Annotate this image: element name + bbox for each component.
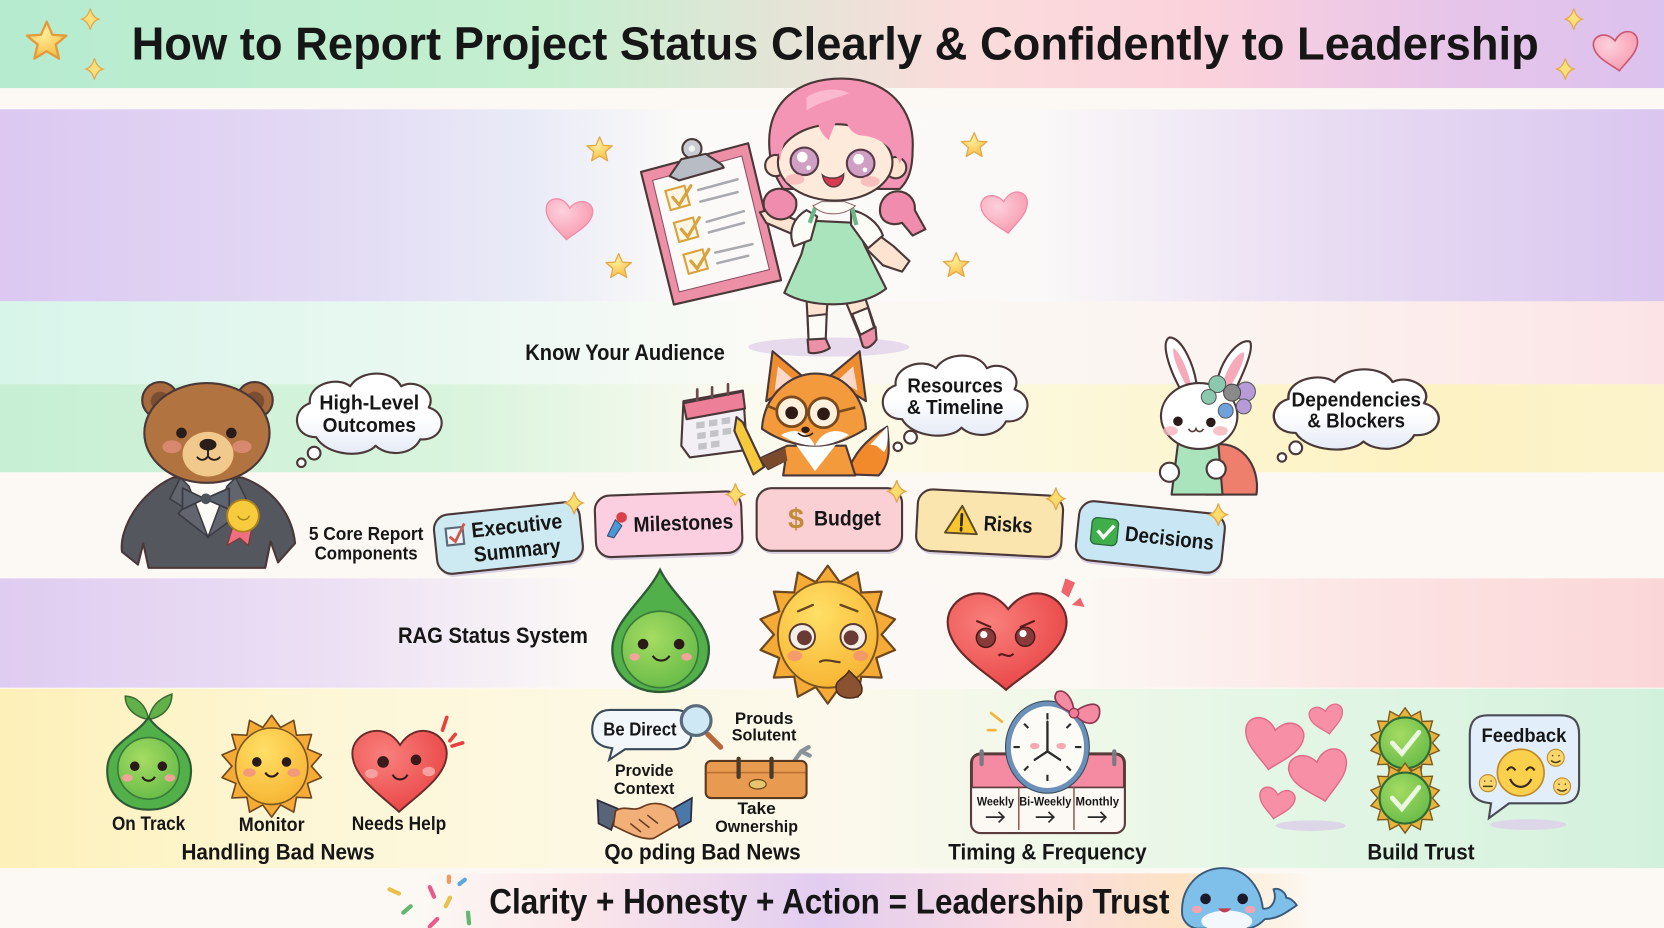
icon: suitcase with wrench xyxy=(706,747,810,798)
flower xyxy=(1201,376,1255,418)
pill: Budget: Budget xyxy=(814,507,881,530)
title banner xyxy=(0,0,1664,88)
thought cloud: Resources & Timeline: Resources xyxy=(907,376,1003,398)
dress xyxy=(784,221,886,304)
text: Take Ownership: Ownership xyxy=(715,817,798,836)
hair back xyxy=(769,79,913,189)
bow tie xyxy=(183,488,229,509)
section heading: Handling Bad News: Handling Bad News xyxy=(181,840,375,865)
icon: red RAG heart xyxy=(948,578,1085,690)
character: bunny with backpack xyxy=(1160,337,1257,495)
icon: handshake xyxy=(597,798,692,839)
icon: header star and sparkles left xyxy=(27,8,103,80)
label: 5 Core Report Components: Components xyxy=(315,543,418,563)
ears xyxy=(765,155,786,176)
icon: sparkle on Risks xyxy=(1047,488,1065,510)
status icon: Monitor xyxy=(222,715,321,836)
text: Provide Context: Context xyxy=(614,779,675,798)
illustration: floating stars and hearts around girl xyxy=(543,133,1031,278)
face xyxy=(778,124,892,201)
icon: calendar with clock and bow: Monthly xyxy=(1076,795,1120,808)
icon: floating hearts xyxy=(1240,703,1354,831)
bunny body xyxy=(1172,444,1223,495)
icon: sparkle on Decisions xyxy=(1209,504,1227,526)
label: 5 Core Report Components xyxy=(309,524,423,563)
fox body xyxy=(760,446,855,475)
pill: Budget: $ xyxy=(788,503,804,535)
text: Prouds Solutent: Prouds xyxy=(735,709,793,728)
fox head xyxy=(762,374,866,446)
clock xyxy=(1008,704,1087,791)
tail xyxy=(847,427,889,475)
thought cloud: Dependencies & Blockers: Dependencies xyxy=(1292,389,1421,411)
status icon: Monitor: Monitor xyxy=(239,815,305,836)
character: blue whale xyxy=(1182,868,1297,928)
glasses xyxy=(766,397,855,436)
thought cloud: High-Level Outcomes: High-Level xyxy=(319,393,419,415)
pill: Executive Summary: Summary xyxy=(473,535,562,567)
bow xyxy=(1055,691,1100,723)
icon: confetti xyxy=(389,877,469,926)
footer banner xyxy=(414,873,1316,928)
title: How to Report Project Status Clearly & Confidently to Leadership xyxy=(132,17,1539,69)
pill: Executive Summary: Executive xyxy=(470,510,564,543)
bear body xyxy=(122,478,295,568)
head xyxy=(1161,383,1237,449)
label: 5 Core Report Components: 5 Core Report xyxy=(309,524,423,544)
pill: Milestones xyxy=(594,491,744,561)
text: Provide Context: Provide xyxy=(615,761,673,780)
rosette xyxy=(227,524,253,545)
footer takeaway: Clarity + Honesty + Action = Leadership Trust xyxy=(489,883,1170,922)
clipboard xyxy=(641,139,781,305)
legs and shoes xyxy=(807,297,876,340)
text: Take Ownership xyxy=(715,799,798,836)
pill: Risks xyxy=(915,489,1065,561)
icon: green RAG drop xyxy=(612,570,709,692)
text: Prouds Solutent: Solutent xyxy=(732,726,797,745)
status icon: On Track: On Track xyxy=(112,814,186,835)
ears xyxy=(1166,337,1197,393)
section heading: Timing & Frequency: Timing & Frequency xyxy=(948,840,1147,865)
head xyxy=(144,383,270,483)
icon: Be Direct speech bubble with magnifier xyxy=(592,706,721,760)
section heading: Build Trust: Build Trust xyxy=(1367,840,1475,865)
character: fox with calendar xyxy=(681,351,889,475)
status icon: Needs Help: Needs Help xyxy=(352,814,446,835)
thought cloud: High-Level Outcomes: Outcomes xyxy=(323,415,416,437)
text: Provide Context xyxy=(614,761,675,798)
label: Know Your Audience: Know Your Audience xyxy=(525,340,725,365)
icon: calendar with clock and bow: Bi-Weekly xyxy=(1019,795,1072,808)
pill: Decisions: Decisions xyxy=(1124,523,1215,555)
icon: two check badges xyxy=(1371,708,1439,833)
character: girl with clipboard xyxy=(641,79,925,357)
icon: header heart and sparkles right xyxy=(1557,8,1641,80)
character: bear in suit xyxy=(122,382,295,568)
pill: Risks: Risks xyxy=(983,512,1033,538)
icon: calendar with clock and bow xyxy=(971,691,1125,833)
icon: sparkle on Budget xyxy=(888,480,906,502)
thought cloud: Dependencies & Blockers xyxy=(1274,369,1439,462)
ears xyxy=(766,351,866,401)
thought cloud: High-Level Outcomes xyxy=(297,374,442,467)
bangs xyxy=(778,81,906,163)
pill: Executive Summary xyxy=(433,501,586,578)
thought cloud: Resources & Timeline: & Timeline xyxy=(907,397,1003,419)
pill: Milestones: Milestones xyxy=(633,510,734,537)
status icon: On Track xyxy=(107,694,191,835)
pencil xyxy=(734,417,764,474)
icon: feedback speech bubble: Feedback xyxy=(1481,726,1567,747)
icon: sparkle on Executive Summary xyxy=(565,492,583,514)
calendar xyxy=(681,384,747,457)
thought cloud: Resources & Timeline xyxy=(883,356,1027,451)
thought cloud: Dependencies & Blockers: & Blockers xyxy=(1307,411,1405,433)
backpack xyxy=(1206,444,1257,495)
pill: Decisions xyxy=(1074,500,1227,577)
pigtails xyxy=(764,189,796,219)
icon: amber RAG sun xyxy=(760,566,895,704)
pill: Budget xyxy=(757,488,903,554)
text: Prouds Solutent xyxy=(732,709,797,745)
arms xyxy=(760,209,809,236)
ears xyxy=(142,382,178,418)
status icon: Needs Help xyxy=(352,717,463,835)
icon: Be Direct speech bubble with magnifier: Be Direct xyxy=(603,719,677,739)
icon: feedback speech bubble xyxy=(1470,715,1579,830)
label: RAG Status System: RAG Status System xyxy=(398,623,588,648)
text: Take Ownership: Take xyxy=(738,799,776,818)
face details xyxy=(785,148,880,187)
icon: sparkle on Milestones xyxy=(727,483,744,506)
icon: calendar with clock and bow: Weekly xyxy=(977,795,1014,808)
section heading: Qo pding Bad News: Qo pding Bad News xyxy=(604,840,801,865)
